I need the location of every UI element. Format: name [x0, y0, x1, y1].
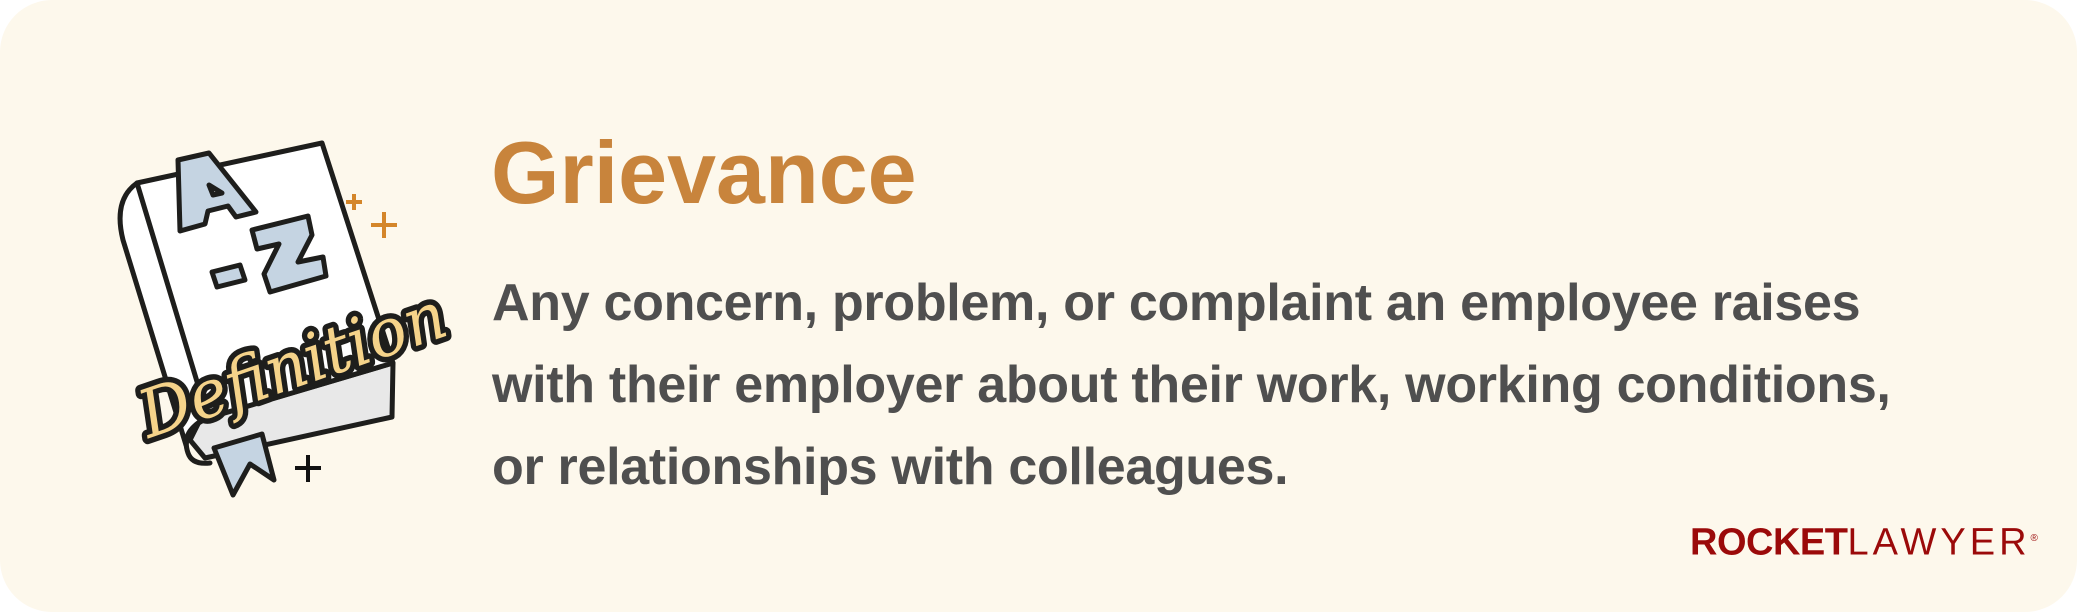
text block: definition [492, 274, 1891, 496]
cover [120, 143, 393, 445]
icon: definition book [118, 140, 456, 498]
title: Grievance [491, 123, 917, 222]
bookmark [214, 434, 274, 495]
sparkles [346, 194, 397, 238]
logo: ROCKETLAWYER® [1690, 522, 2038, 564]
letter Z [252, 216, 326, 292]
text block: definition: with their employer about their work, working conditions, [492, 356, 1891, 414]
dash [212, 265, 245, 287]
script word Definition: Definition [128, 277, 456, 454]
letter A [178, 153, 256, 231]
page block [190, 363, 393, 458]
text block: definition: Any concern, problem, or complaint an employee raises [492, 274, 1860, 332]
text block: definition: or relationships with colleagues. [492, 438, 1288, 496]
